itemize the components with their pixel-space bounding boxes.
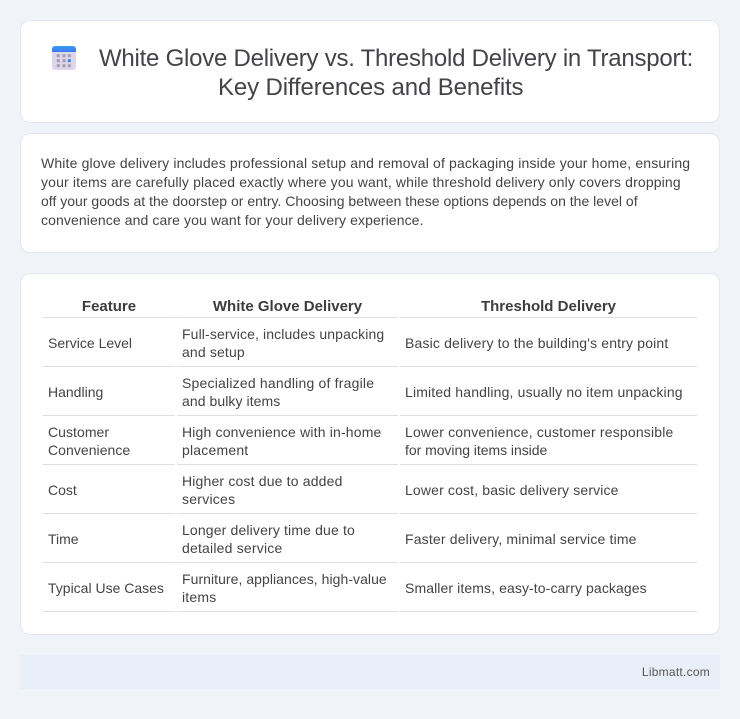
row: handling: Specialized handling of fragile	[182, 375, 374, 391]
row: cost	[48, 473, 619, 507]
row: typical use cases: items	[182, 589, 216, 605]
row: cost: Higher cost due to added	[182, 473, 343, 489]
row: handling	[48, 375, 683, 409]
table header	[82, 298, 616, 315]
table header: Feature	[82, 298, 136, 315]
row: typical use cases: Furniture, appliances, high-value	[182, 571, 387, 587]
panel: intro	[20, 133, 720, 253]
row: service level	[48, 326, 668, 360]
title: Key Differences and Benefits	[218, 74, 523, 101]
row: customer convenience: Customer	[48, 424, 109, 440]
table header: Threshold Delivery	[481, 298, 616, 315]
row: time: Longer delivery time due to	[182, 522, 355, 538]
title	[99, 45, 693, 101]
panel: header	[20, 20, 720, 123]
row: cost: Lower cost, basic delivery service	[405, 482, 619, 498]
row: customer convenience: placement	[182, 442, 248, 458]
row: service level: Basic delivery to the building's entry point	[405, 335, 668, 351]
row: time	[48, 522, 637, 556]
panel: comparison table	[20, 273, 720, 635]
row: cost: Cost	[48, 482, 77, 498]
intro text: White glove delivery includes professional setup and removal of packaging inside your home, ensuring	[41, 155, 690, 171]
row: service level: Full-service, includes unpacking	[182, 326, 384, 342]
row: time: Time	[48, 531, 79, 547]
icon: calendar	[52, 46, 76, 70]
intro text: convenience and care you want for your delivery experience.	[41, 212, 424, 228]
title: White Glove Delivery vs. Threshold Delivery in Transport:	[99, 45, 693, 72]
row: typical use cases: Smaller items, easy-to-carry packages	[405, 580, 647, 596]
row: handling: and bulky items	[182, 393, 280, 409]
row: service level: Service Level	[48, 335, 132, 351]
row: typical use cases	[48, 571, 647, 605]
intro text: off your goods at the doorstep or entry. Choosing between these options depends on the level of	[41, 193, 638, 209]
row: customer convenience: Convenience	[48, 442, 130, 458]
row: typical use cases: Typical Use Cases	[48, 580, 164, 596]
row: cost: services	[182, 491, 235, 507]
row: customer convenience: High convenience with in-home	[182, 424, 381, 440]
footer	[20, 655, 720, 689]
table header: White Glove Delivery	[213, 298, 362, 315]
row: time: Faster delivery, minimal service time	[405, 531, 637, 547]
row: customer convenience	[48, 424, 674, 458]
row: time: detailed service	[182, 540, 282, 556]
intro text: your items are carefully placed exactly where you want, while threshold delivery only covers dropping	[41, 174, 681, 190]
row: handling: Limited handling, usually no item unpacking	[405, 384, 683, 400]
footer credit: Libmatt.com	[642, 665, 710, 679]
row: customer convenience: for moving items inside	[405, 442, 547, 458]
row: handling: Handling	[48, 384, 103, 400]
intro text	[41, 155, 690, 228]
row: customer convenience: Lower convenience, customer responsible	[405, 424, 674, 440]
row: service level: and setup	[182, 344, 245, 360]
